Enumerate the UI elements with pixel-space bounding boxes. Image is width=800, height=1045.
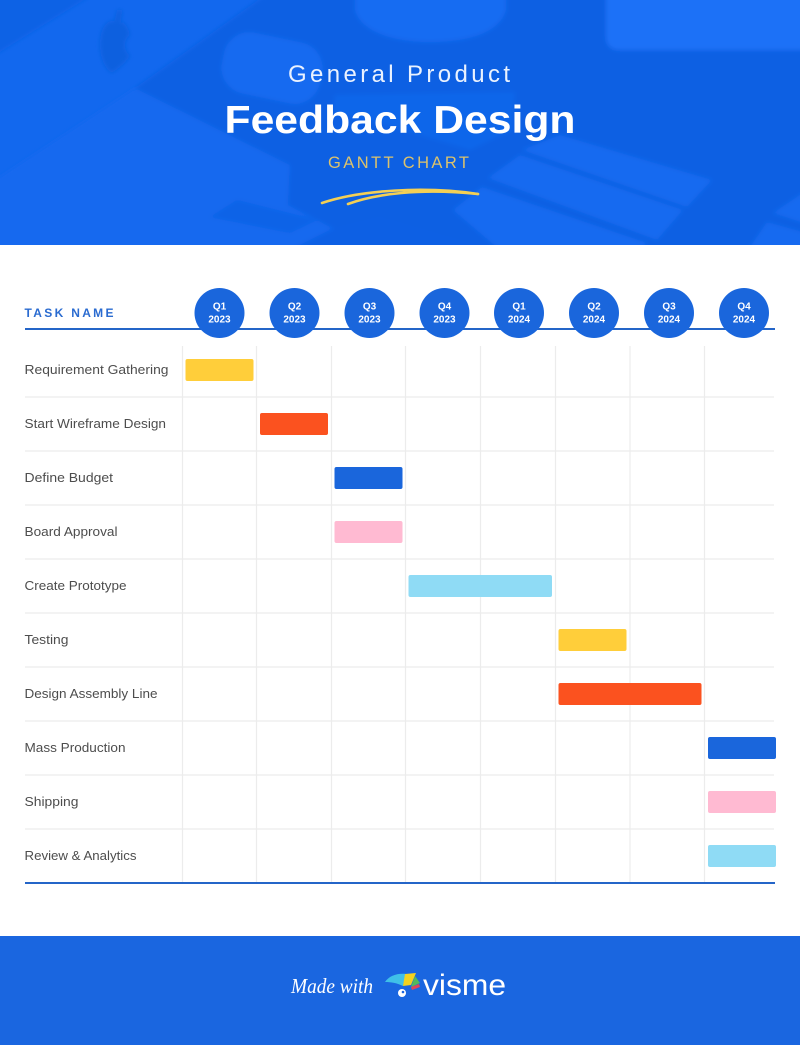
gantt chart xyxy=(24,288,776,884)
Q1 2023 xyxy=(194,288,244,338)
icon: apple logo watermark xyxy=(100,10,130,72)
Q4 2024: Q4 xyxy=(737,302,751,312)
bar: Design Assembly Line xyxy=(558,683,702,705)
heading: task name: TASK NAME xyxy=(24,306,114,320)
bar: Requirement Gathering xyxy=(186,359,254,381)
title: General Product: General Product xyxy=(288,61,510,88)
icon: visme logo xyxy=(385,973,420,997)
bar: Create Prototype xyxy=(408,575,552,597)
Q3 2023: 2023 xyxy=(358,314,381,326)
Q3 2024 xyxy=(644,288,694,338)
Q1 2023: Q1 xyxy=(213,302,227,312)
bar: Testing xyxy=(558,629,626,651)
label: Review & Analytics: Review & Analytics xyxy=(24,848,137,863)
Q3 2023: Q3 xyxy=(363,302,377,312)
Q4 2024 xyxy=(719,288,769,338)
Q1 2023: 2023 xyxy=(208,314,231,326)
task labels xyxy=(24,362,168,863)
label: Define Budget: Define Budget xyxy=(24,470,113,485)
quarter markers xyxy=(194,288,769,338)
label: Requirement Gathering: Requirement Gathering xyxy=(24,362,168,377)
label: Mass Production: Mass Production xyxy=(24,740,126,755)
Q2 2023: 2023 xyxy=(283,314,306,326)
bar: Board Approval xyxy=(334,521,402,543)
footer: made with visme xyxy=(290,969,506,1002)
grid lines xyxy=(25,346,774,882)
decorative yellow swoosh xyxy=(322,190,478,204)
bar: Start Wireframe Design xyxy=(260,413,328,435)
bar: Review & Analytics xyxy=(708,845,776,867)
bar: Mass Production xyxy=(708,737,776,759)
bar: Shipping xyxy=(708,791,776,813)
header banner xyxy=(0,0,800,250)
Q3 2024: 2024 xyxy=(658,314,681,326)
label: Board Approval: Board Approval xyxy=(24,524,118,539)
Q4 2023: 2023 xyxy=(433,314,456,326)
Q1 2024 xyxy=(494,288,544,338)
Q2 2024: Q2 xyxy=(587,302,601,312)
Q4 2023 xyxy=(420,288,470,338)
bottom rule xyxy=(25,882,775,884)
text: visme: visme xyxy=(423,969,506,1002)
Q4 2024: 2024 xyxy=(733,314,756,326)
text: Made with: Made with xyxy=(290,974,373,998)
header rule xyxy=(25,328,775,330)
Q2 2023: Q2 xyxy=(288,302,302,312)
Q2 2024 xyxy=(569,288,619,338)
Q1 2024: Q1 xyxy=(512,302,526,312)
bar: Define Budget xyxy=(334,467,402,489)
label: Testing: Testing xyxy=(24,632,68,647)
Q1 2024: 2024 xyxy=(508,314,531,326)
Q3 2024: Q3 xyxy=(662,302,676,312)
label: Shipping: Shipping xyxy=(24,794,78,809)
label: Design Assembly Line: Design Assembly Line xyxy=(24,686,158,701)
label: Create Prototype: Create Prototype xyxy=(24,578,126,593)
Q2 2023 xyxy=(270,288,320,338)
Q3 2023 xyxy=(344,288,394,338)
Q4 2023: Q4 xyxy=(438,302,452,312)
task bars xyxy=(186,359,776,867)
footer band xyxy=(0,936,800,1045)
Q2 2024: 2024 xyxy=(583,314,606,326)
title: Feedback Design: Feedback Design xyxy=(224,99,576,142)
subtitle: Gantt Chart: GANTT CHART xyxy=(328,154,469,172)
label: Start Wireframe Design: Start Wireframe Design xyxy=(24,416,166,431)
